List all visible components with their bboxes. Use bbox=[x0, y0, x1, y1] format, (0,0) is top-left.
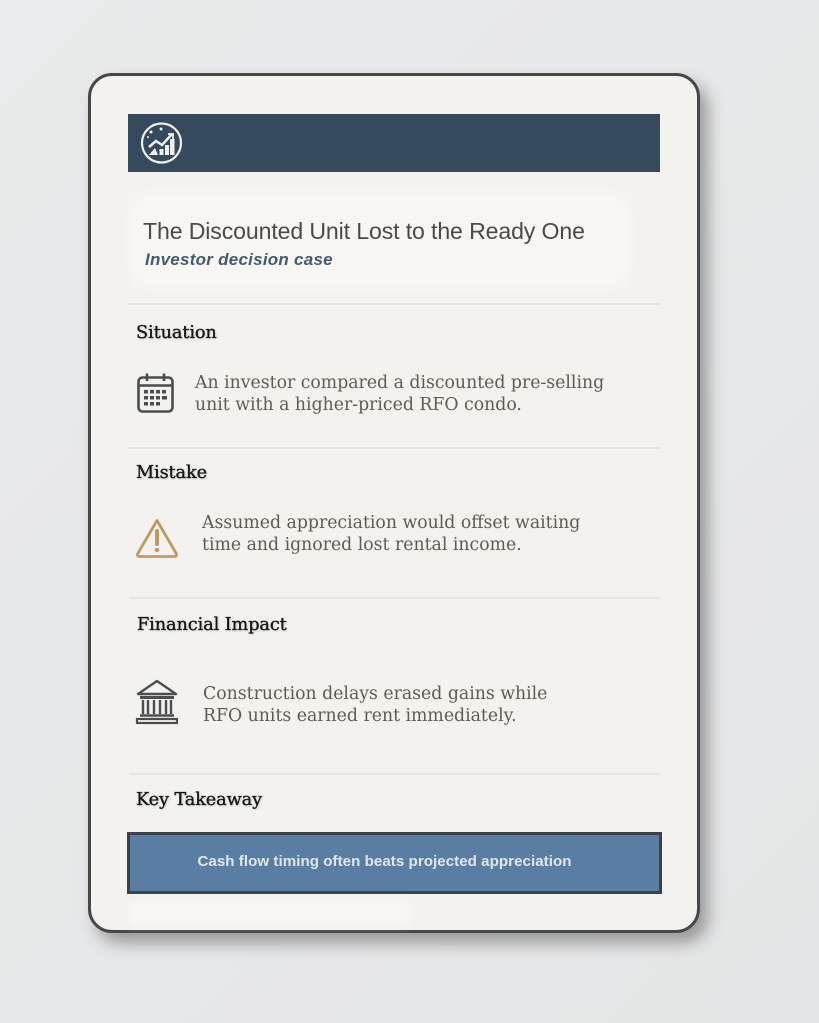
heading: mistake: Mistake bbox=[136, 463, 207, 483]
title: The Discounted Unit Lost to the Ready One bbox=[143, 218, 585, 244]
icon: chart dial bbox=[140, 122, 182, 164]
text: mistake bbox=[202, 513, 580, 555]
heading: situation: Situation bbox=[136, 323, 217, 343]
section: mistake bbox=[136, 463, 580, 558]
heading: key takeaway: Key Takeaway bbox=[136, 790, 262, 810]
icon: calendar bbox=[137, 374, 174, 413]
text: situation: An investor compared a discounted pre-selling bbox=[195, 373, 604, 393]
section: situation bbox=[136, 323, 604, 415]
light patch below banner bbox=[130, 901, 410, 925]
text: financial impact: Construction delays erased gains while bbox=[203, 684, 547, 704]
heading: financial impact: Financial Impact bbox=[137, 615, 287, 635]
section: financial impact bbox=[136, 615, 547, 726]
icon: bank bbox=[136, 680, 178, 724]
text: mistake: Assumed appreciation would offset waiting bbox=[202, 513, 580, 533]
header bar bbox=[128, 114, 660, 172]
light patch behind title bbox=[130, 192, 630, 288]
card panel bbox=[88, 73, 700, 933]
text: situation: unit with a higher-priced RFO condo. bbox=[195, 395, 522, 415]
takeaway text: Cash flow timing often beats projected appreciation bbox=[197, 853, 572, 870]
text: situation bbox=[194, 373, 604, 415]
text: financial impact bbox=[203, 684, 547, 726]
text: mistake: time and ignored lost rental income. bbox=[202, 535, 522, 555]
text: financial impact: RFO units earned rent immediately. bbox=[203, 706, 517, 726]
takeaway banner bbox=[127, 832, 662, 894]
subtitle: Investor decision case bbox=[145, 250, 333, 269]
icon: warning triangle bbox=[136, 519, 178, 558]
